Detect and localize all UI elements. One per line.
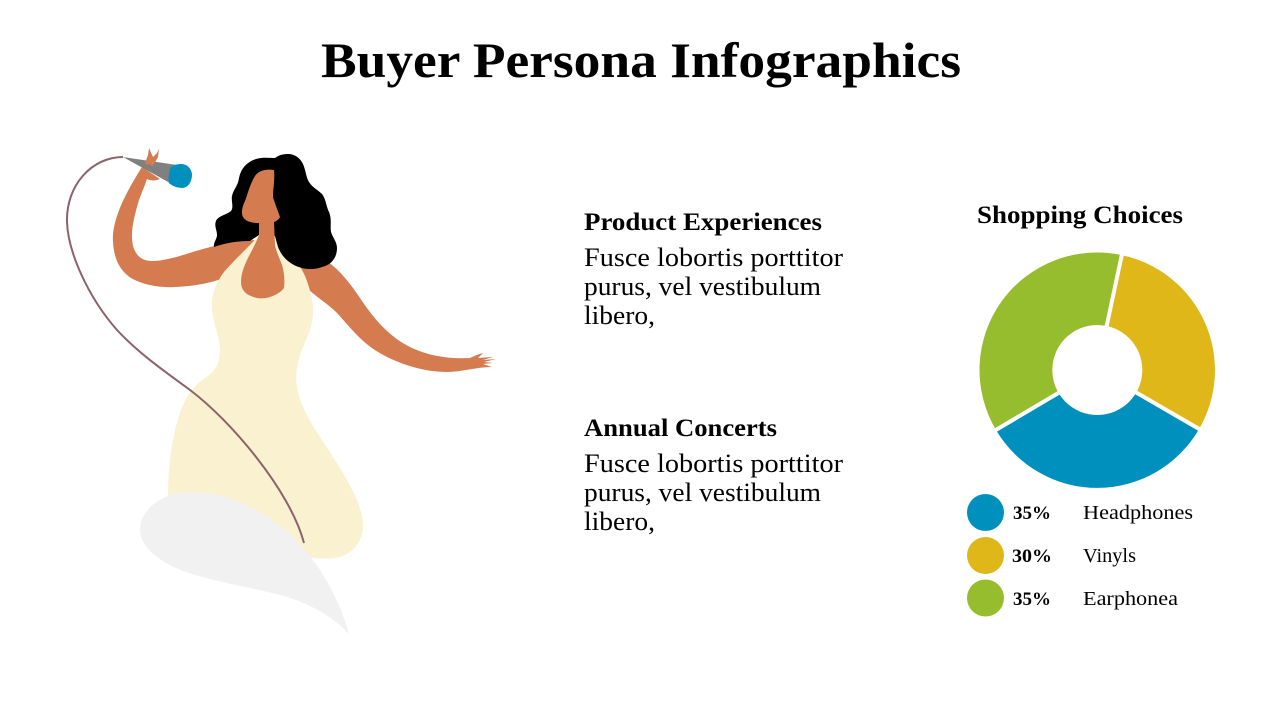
body: Fusce lobortis porttitor bbox=[584, 243, 843, 272]
microphone head bbox=[169, 164, 192, 188]
legend item: vinyls: Vinyls bbox=[1083, 546, 1136, 567]
legend item: earphonea bbox=[967, 580, 1178, 616]
body bbox=[584, 449, 843, 536]
body: libero, bbox=[584, 507, 655, 536]
chart heading: Shopping Choices bbox=[977, 200, 1183, 229]
right arm bbox=[296, 258, 496, 372]
body bbox=[584, 243, 843, 330]
illustration: singer with microphone bbox=[67, 148, 496, 634]
legend item: headphones: Headphones bbox=[1083, 503, 1193, 524]
heading: Product Experiences bbox=[584, 207, 822, 236]
dress bbox=[168, 235, 363, 559]
microphone cord bbox=[67, 157, 304, 543]
text block: annual concerts bbox=[584, 413, 843, 536]
legend item: headphones bbox=[967, 494, 1193, 531]
body: Fusce lobortis porttitor bbox=[584, 449, 843, 478]
title: Buyer Persona Infographics bbox=[321, 32, 961, 88]
segment: earphonea bbox=[980, 252, 1122, 430]
segment: vinyls bbox=[1097, 255, 1215, 429]
legend item: headphones: 35% bbox=[1013, 503, 1051, 524]
legend bbox=[967, 494, 1193, 616]
microphone handle bbox=[123, 157, 177, 183]
body: purus, vel vestibulum bbox=[584, 272, 821, 301]
legend item: vinyls bbox=[967, 537, 1136, 574]
text block: product experiences bbox=[584, 207, 843, 330]
left arm and hand bbox=[113, 167, 256, 287]
skirt leaf bbox=[140, 492, 349, 634]
legend item: earphonea: 35% bbox=[1013, 589, 1051, 610]
heading: Annual Concerts bbox=[584, 413, 777, 442]
legend item: vinyls: 30% bbox=[1012, 546, 1052, 567]
segment: headphones bbox=[996, 370, 1199, 488]
hair bbox=[214, 154, 337, 269]
body: libero, bbox=[584, 301, 655, 330]
body: purus, vel vestibulum bbox=[584, 478, 821, 507]
legend item: earphonea: Earphonea bbox=[1083, 589, 1178, 610]
face, neck and chest bbox=[241, 170, 284, 298]
donut chart bbox=[980, 252, 1215, 488]
microphone fingers bbox=[145, 148, 159, 166]
